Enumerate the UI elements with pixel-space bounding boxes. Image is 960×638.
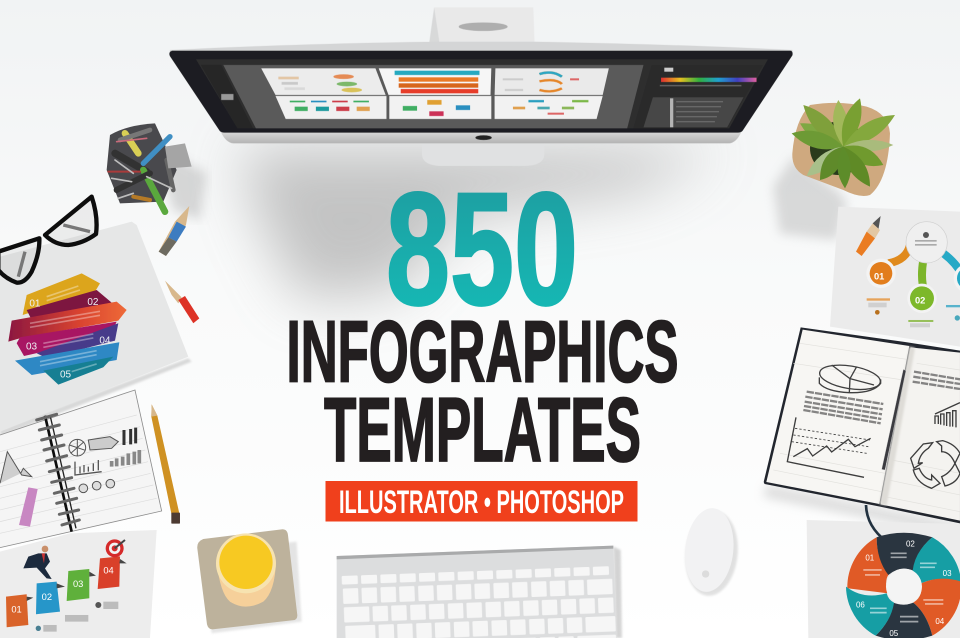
step numbers: 04 bbox=[103, 566, 114, 576]
stand base bbox=[422, 143, 544, 166]
right page text block bbox=[913, 372, 960, 389]
glasses bbox=[0, 197, 97, 283]
steps bbox=[6, 539, 127, 632]
sketch arrows bbox=[88, 437, 118, 450]
notebook cover bbox=[764, 327, 960, 523]
small captions bbox=[36, 602, 118, 632]
keyboard top edge bbox=[337, 546, 613, 559]
sketch markers bbox=[124, 428, 136, 445]
monitor chin bbox=[221, 133, 741, 143]
coaster with orange drink bbox=[197, 529, 302, 633]
keyboard bbox=[337, 546, 622, 638]
sketch bars bbox=[75, 460, 102, 475]
ribbon labels: 02 bbox=[87, 297, 99, 308]
sketched charts bbox=[0, 428, 139, 493]
cycle arrows sketch bbox=[911, 441, 960, 488]
steps card bbox=[0, 530, 157, 638]
segment 05 bbox=[876, 603, 932, 638]
mouse body bbox=[681, 506, 738, 594]
spine shade bbox=[879, 347, 915, 505]
ring labels: 05 bbox=[889, 629, 899, 638]
segment 04 bbox=[913, 579, 960, 636]
spiral notebook bbox=[0, 390, 180, 548]
number row bbox=[343, 579, 613, 604]
bars sketch bbox=[935, 403, 960, 427]
ruled lines bbox=[773, 343, 960, 512]
segment 01 bbox=[847, 537, 890, 593]
cycle ring chart bbox=[807, 505, 960, 638]
open notebook bbox=[763, 327, 960, 537]
pen bbox=[882, 369, 906, 470]
ring labels: 03 bbox=[943, 569, 952, 578]
ribbon teal bbox=[43, 357, 113, 385]
number 850: 850 bbox=[386, 159, 578, 338]
card paper bbox=[807, 520, 960, 638]
paper in cup bbox=[165, 143, 192, 168]
monitor bezel bbox=[169, 51, 793, 133]
notebook page shadow bbox=[0, 358, 192, 437]
line chart sketch bbox=[787, 417, 871, 477]
sketch column chart bbox=[112, 450, 139, 467]
ribbon lines bbox=[30, 286, 100, 372]
circles card bbox=[830, 207, 960, 347]
qwerty row bbox=[344, 597, 614, 623]
step numbers bbox=[11, 566, 114, 614]
ribbon blue bbox=[15, 342, 119, 375]
sketch triangle bbox=[0, 452, 32, 483]
target icon bbox=[106, 539, 125, 557]
blue pencil bbox=[159, 206, 189, 256]
ruled lines bbox=[0, 415, 157, 533]
mouse bbox=[681, 506, 742, 598]
step numbers: 02 bbox=[42, 592, 52, 602]
function row bbox=[342, 566, 609, 585]
orange pencil bbox=[856, 216, 881, 256]
ribbon labels: 01 bbox=[29, 299, 41, 310]
monitor bbox=[169, 7, 793, 166]
ring hole bbox=[886, 569, 922, 605]
card paper bbox=[0, 530, 157, 638]
left page bbox=[766, 330, 909, 504]
ring labels bbox=[856, 540, 952, 638]
notebook with hexagon infographic bbox=[0, 197, 192, 437]
step numbers: 03 bbox=[73, 579, 83, 589]
monitor screen bbox=[196, 59, 768, 128]
spiral binding bbox=[37, 414, 79, 532]
notebook page bbox=[0, 222, 188, 432]
notebook shadow bbox=[763, 485, 960, 537]
center circle bbox=[906, 222, 947, 263]
heading: infographics: INFOGRAPHICS bbox=[286, 304, 678, 400]
segment 02 bbox=[877, 533, 932, 575]
software badge: ILLUSTRATOR • PHOTOSHOP bbox=[339, 484, 624, 520]
pen cup bbox=[107, 123, 207, 220]
segment 06 bbox=[846, 587, 894, 636]
drink glass bbox=[216, 533, 276, 607]
yellow pencil bbox=[151, 404, 180, 524]
headline block bbox=[286, 159, 678, 522]
ring labels: 06 bbox=[856, 600, 865, 609]
card paper bbox=[830, 207, 960, 347]
bookmark ribbon bbox=[866, 505, 887, 542]
home row bbox=[345, 616, 616, 638]
coaster shadow bbox=[203, 542, 302, 633]
plant hollow bbox=[810, 122, 867, 175]
pens bbox=[108, 130, 173, 212]
coaster bbox=[197, 529, 297, 629]
right page bbox=[881, 347, 960, 521]
mouse shadow bbox=[681, 508, 742, 598]
bottom row bbox=[346, 635, 616, 638]
ribbon orange bbox=[8, 302, 127, 342]
step 2 circle bbox=[907, 284, 937, 313]
ring text lines bbox=[863, 553, 943, 622]
plant leaves bbox=[792, 98, 895, 188]
plant pot bbox=[792, 103, 890, 196]
ribbon magenta bbox=[17, 322, 117, 356]
monitor cast shadow bbox=[240, 150, 720, 300]
red pencil bbox=[165, 281, 199, 323]
heading: templates: TEMPLATES bbox=[324, 380, 641, 481]
step numbers: 01 bbox=[11, 604, 22, 614]
keyboard shadow bbox=[613, 547, 622, 638]
ribbon labels: 04 bbox=[99, 335, 111, 346]
plant shadow bbox=[773, 157, 847, 240]
sketch pie bbox=[69, 439, 86, 456]
ribbon labels bbox=[26, 297, 111, 381]
ring labels: 04 bbox=[935, 617, 945, 626]
keys bbox=[342, 566, 616, 638]
ring bbox=[846, 533, 960, 638]
screen thumbnail panel bbox=[261, 68, 609, 119]
running man bbox=[23, 546, 52, 579]
cup shadow bbox=[157, 147, 207, 220]
hexagon ribbon chart bbox=[8, 273, 127, 385]
notebook edges bbox=[0, 390, 162, 548]
card captions bbox=[867, 298, 960, 327]
ribbon yellow bbox=[23, 273, 100, 315]
left page text block bbox=[803, 392, 883, 423]
potted plant bbox=[773, 98, 895, 240]
sketch icons bbox=[79, 479, 115, 493]
ribbon labels: 05 bbox=[60, 370, 72, 381]
ring labels: 02 bbox=[906, 540, 915, 549]
segment 03 bbox=[913, 537, 960, 583]
3d pie sketch bbox=[818, 361, 882, 393]
notebook sheet bbox=[0, 390, 162, 548]
keyboard body bbox=[337, 546, 617, 638]
monitor frame bbox=[170, 42, 792, 55]
ribbon maroon bbox=[27, 290, 112, 323]
monitor stand arm bbox=[429, 7, 535, 43]
step 3 circle bbox=[954, 264, 960, 293]
ribbon purple bbox=[37, 323, 118, 358]
purple eraser bbox=[19, 487, 38, 527]
step 1 circle bbox=[866, 259, 896, 288]
ring labels: 01 bbox=[865, 554, 875, 563]
circle connectors bbox=[888, 245, 960, 293]
screen side panels bbox=[633, 65, 763, 128]
step 1 circle: 01 bbox=[874, 271, 884, 281]
ribbon labels: 03 bbox=[26, 341, 38, 352]
software badge bbox=[326, 481, 638, 522]
step 2 circle: 02 bbox=[915, 295, 925, 305]
cup body bbox=[107, 123, 177, 203]
